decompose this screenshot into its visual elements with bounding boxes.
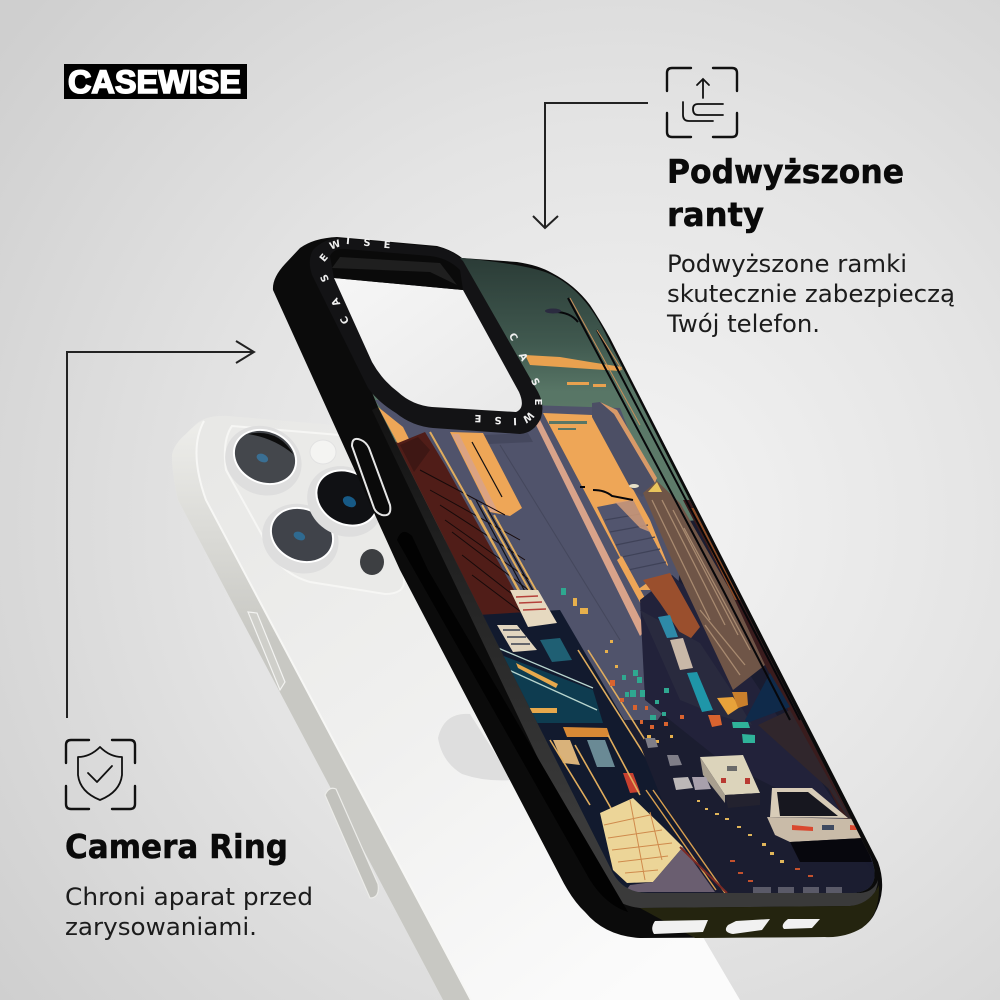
shop sign small <box>497 625 537 652</box>
brick building <box>396 432 521 620</box>
curb lines <box>646 790 725 893</box>
case bottom edge <box>640 885 879 938</box>
ring lettering: S <box>494 414 502 425</box>
ring lettering <box>318 236 543 426</box>
text: camera ring description <box>65 883 313 941</box>
storefront gold lines <box>549 650 645 808</box>
port: speaker left <box>652 920 708 934</box>
lens 3 <box>294 453 396 550</box>
camera ring <box>310 236 543 434</box>
top-left orange <box>378 407 409 444</box>
ring lettering: A <box>516 351 529 363</box>
flash <box>310 440 336 464</box>
orange awnings <box>717 697 740 715</box>
road <box>640 714 874 893</box>
awning teal <box>504 656 603 723</box>
shop sign cream <box>510 590 557 627</box>
tan building <box>643 481 765 690</box>
lower right facades <box>758 710 850 819</box>
ring lettering: E <box>474 412 482 423</box>
ring lettering: E <box>532 399 543 406</box>
black case <box>273 236 890 938</box>
icon: raised edges <box>667 68 737 137</box>
camera plateau <box>225 426 404 594</box>
apple logo <box>438 714 512 780</box>
side button lower <box>325 788 378 898</box>
grey pavement <box>625 847 715 892</box>
street light poles <box>555 298 800 720</box>
shop front base <box>478 610 690 890</box>
ring lettering: A <box>330 296 343 308</box>
text: camera ring description: Chroni aparat przed <box>65 883 313 911</box>
heading: raised edges <box>667 152 904 234</box>
shop windows <box>553 740 580 765</box>
case glossy lower sidewall <box>372 407 878 908</box>
awning lettering <box>516 663 558 713</box>
case shell <box>273 237 882 938</box>
distant tower 1 <box>592 402 657 497</box>
ring lettering: I <box>513 415 517 426</box>
inner lip <box>330 249 463 290</box>
orange banner <box>563 727 610 737</box>
foreground car <box>770 788 848 818</box>
right brown wall <box>683 500 860 838</box>
heading: camera ring: Camera Ring <box>65 827 288 866</box>
text: raised edges description: skutecznie zabezpieczą <box>667 280 955 308</box>
text: raised edges description: Podwyższone ramki <box>667 250 907 278</box>
arrow: to raised edges <box>533 103 648 228</box>
white truck <box>700 755 760 795</box>
gold building trim <box>429 432 537 590</box>
city lights dots <box>561 588 669 720</box>
central tower detail <box>483 433 533 444</box>
lower scene dark base <box>440 520 890 900</box>
ring lettering: E <box>318 252 331 264</box>
port: speaker right <box>783 919 820 929</box>
pink cornice stripe <box>535 420 646 636</box>
pavers <box>600 798 683 883</box>
road markings <box>697 800 784 863</box>
side button upper <box>248 612 285 690</box>
text: raised edges description <box>666 250 955 338</box>
street base grey <box>375 400 680 720</box>
teal blocks <box>732 722 750 728</box>
shop sign blue <box>540 638 572 662</box>
orange clouds <box>526 355 622 387</box>
ring lettering: S <box>319 272 332 283</box>
sky <box>370 250 890 910</box>
printed artwork <box>370 250 890 910</box>
sidewall slot <box>397 532 628 912</box>
street signs <box>658 615 678 638</box>
ring lettering: C <box>506 331 519 343</box>
right building base <box>640 575 880 870</box>
side button on case <box>352 439 390 515</box>
ring lettering: C <box>339 314 352 326</box>
crosswalk <box>753 887 842 893</box>
navy awning <box>745 673 790 723</box>
brick building right <box>643 573 700 643</box>
white phone <box>172 414 740 1000</box>
ring lettering: E <box>383 240 391 251</box>
heading: raised edges: Podwyższone <box>667 152 904 191</box>
ring lettering: S <box>528 376 541 388</box>
logo: CASEWISE: CASEWISE <box>68 64 241 100</box>
icon: shield <box>66 740 135 809</box>
dark mid building <box>640 610 691 643</box>
overhead wires <box>420 470 535 615</box>
ring lettering: S <box>363 238 371 249</box>
lidar sensor <box>360 549 384 575</box>
main orange sky <box>543 413 668 590</box>
distant tower 2 <box>597 500 673 590</box>
lens 2 <box>251 492 350 586</box>
ring lettering: W <box>328 238 342 253</box>
port: usb <box>726 919 770 934</box>
heading: raised edges: ranty <box>667 195 764 234</box>
ring lettering: I <box>346 236 350 247</box>
left orange strip <box>450 432 522 516</box>
small cars <box>673 777 693 790</box>
camera opening <box>334 278 522 412</box>
text: camera ring description: zarysowaniami. <box>65 913 257 941</box>
arrow: to camera ring <box>67 341 254 718</box>
lens 1 <box>214 414 313 508</box>
text: raised edges description: Twój telefon. <box>666 310 820 338</box>
ring lettering: W <box>520 409 535 424</box>
